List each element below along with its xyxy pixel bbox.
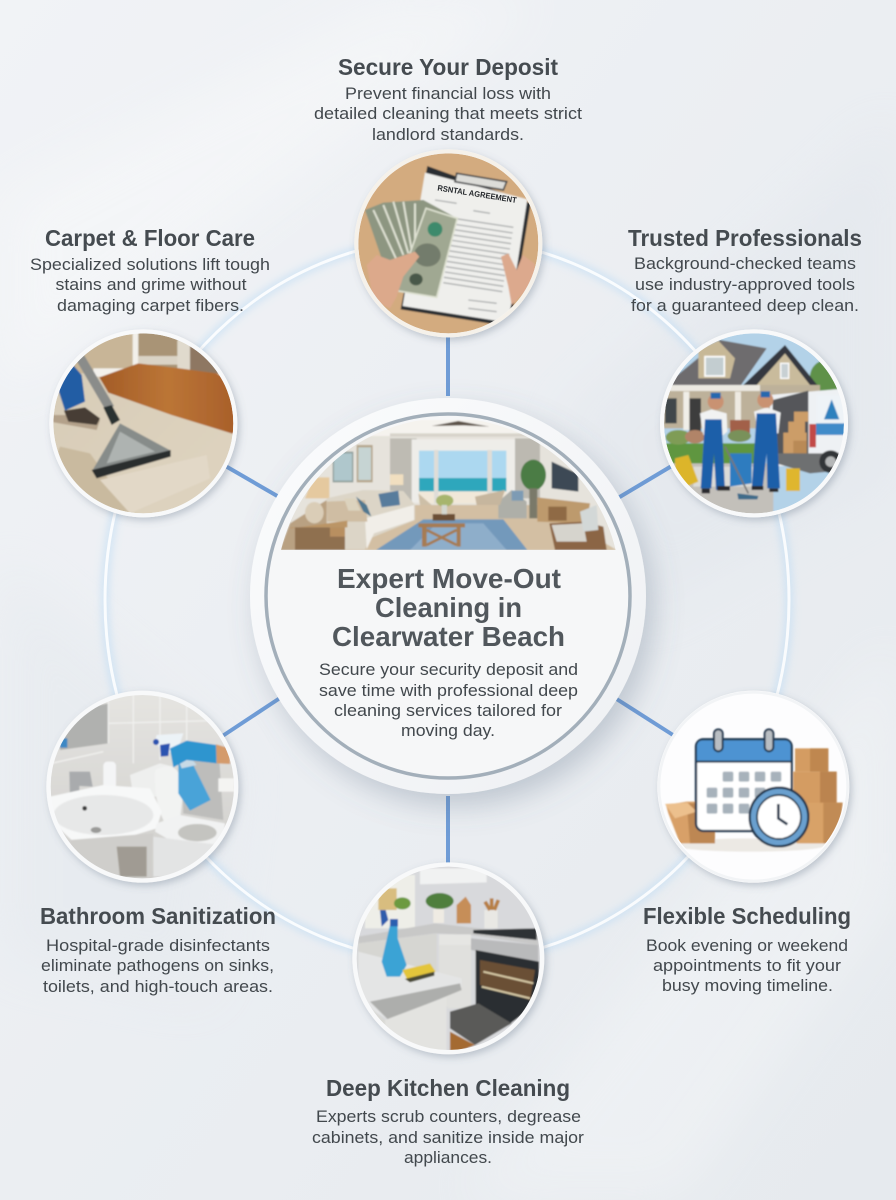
panel: Deep Kitchen Cleaning xyxy=(312,862,585,1167)
hub description: moving day. xyxy=(401,722,495,740)
hub description xyxy=(319,661,578,740)
image: rental agreement and cash xyxy=(353,149,543,337)
heading: Secure Your Deposit xyxy=(338,54,558,80)
description: appliances. xyxy=(404,1149,492,1167)
heading: Flexible Scheduling xyxy=(643,903,851,929)
hub title: Cleaning in xyxy=(375,592,522,623)
image: kitchen counter and oven xyxy=(352,862,545,1055)
description: detailed cleaning that meets strict xyxy=(314,105,582,123)
description: Specialized solutions lift tough xyxy=(30,256,270,274)
heading: Bathroom Sanitization xyxy=(40,903,276,929)
description: Background-checked teams xyxy=(634,255,856,273)
description xyxy=(312,1108,585,1167)
description xyxy=(631,255,859,315)
description: for a guaranteed deep clean. xyxy=(631,297,859,315)
description: eliminate pathogens on sinks, xyxy=(41,957,274,975)
photo: beach living room xyxy=(280,420,617,552)
hub disc xyxy=(250,398,646,794)
glowing orbit ring xyxy=(105,238,789,962)
description xyxy=(646,937,848,995)
description: Prevent financial loss with xyxy=(345,85,551,103)
panel: Flexible Scheduling xyxy=(643,691,851,995)
description: toilets, and high-touch areas. xyxy=(43,978,273,996)
image: carpet cleaning wand xyxy=(49,329,237,517)
hub description: Secure your security deposit and xyxy=(319,661,578,679)
image: calendar clock and boxes xyxy=(657,691,849,883)
description: Book evening or weekend xyxy=(646,937,848,955)
description: busy moving timeline. xyxy=(662,977,833,995)
panel: Secure Your Deposit xyxy=(314,54,582,337)
description xyxy=(314,85,582,144)
heading: Deep Kitchen Cleaning xyxy=(326,1075,570,1101)
description: landlord standards. xyxy=(372,126,524,144)
description: cabinets, and sanitize inside major xyxy=(312,1129,585,1147)
description xyxy=(41,937,274,996)
hub title: Clearwater Beach xyxy=(332,621,565,652)
description: Experts scrub counters, degrease xyxy=(316,1108,581,1126)
panel: center hub xyxy=(250,398,646,794)
image: bathroom sink and toilet xyxy=(46,691,238,883)
hub title xyxy=(332,563,565,652)
connector lines xyxy=(221,335,675,866)
panel: Carpet & Floor Care xyxy=(30,225,270,517)
heading: Trusted Professionals xyxy=(628,225,862,251)
panel: Trusted Professionals xyxy=(628,225,862,517)
image: cleaning crew and van xyxy=(660,329,850,517)
description: appointments to fit your xyxy=(653,957,842,975)
description: use industry-approved tools xyxy=(635,276,855,294)
description xyxy=(30,256,270,315)
hub description: cleaning services tailored for xyxy=(334,702,563,720)
hub title: Expert Move-Out xyxy=(337,563,561,594)
description: damaging carpet fibers. xyxy=(57,297,244,315)
image: rental agreement and cash: RSNTAL AGREEMENT xyxy=(437,183,517,205)
panel: Bathroom Sanitization xyxy=(40,691,276,996)
description: stains and grime without xyxy=(56,276,247,294)
heading: Carpet & Floor Care xyxy=(45,225,255,251)
hub description: save time with professional deep xyxy=(319,682,578,700)
description: Hospital-grade disinfectants xyxy=(46,937,270,955)
